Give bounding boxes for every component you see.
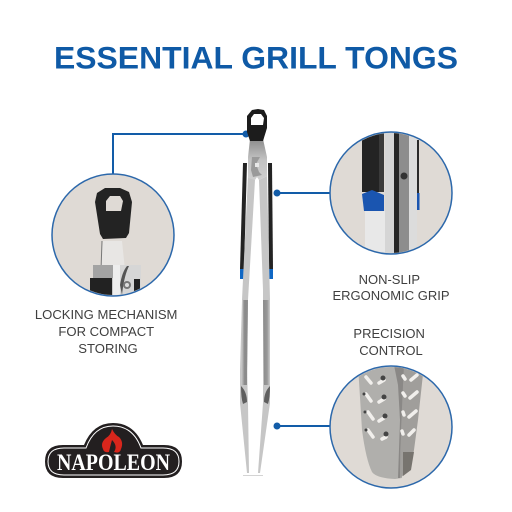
label: precision control: CONTROL xyxy=(359,343,423,358)
panel: precision control close-up xyxy=(330,365,452,488)
label: precision control: PRECISION xyxy=(353,326,425,341)
logo: Napoleon: NAPOLEON xyxy=(57,450,170,475)
label: non-slip grip: ERGONOMIC GRIP xyxy=(332,288,450,303)
tongs illustration xyxy=(240,109,273,476)
connector: non-slip grip xyxy=(274,190,331,196)
label: locking mechanism: FOR COMPACT xyxy=(58,324,154,339)
panel: locking mechanism close-up xyxy=(52,174,174,300)
connector: precision control xyxy=(274,422,331,430)
label: locking mechanism: LOCKING MECHANISM xyxy=(35,307,177,322)
title: ESSENTIAL GRILL TONGS xyxy=(54,40,458,76)
connector: locking mechanism xyxy=(113,130,250,174)
label: locking mechanism: STORING xyxy=(78,341,138,356)
label: non-slip grip: NON-SLIP xyxy=(359,272,420,287)
logo: Napoleon xyxy=(45,423,182,478)
panel: grip close-up xyxy=(330,130,452,261)
